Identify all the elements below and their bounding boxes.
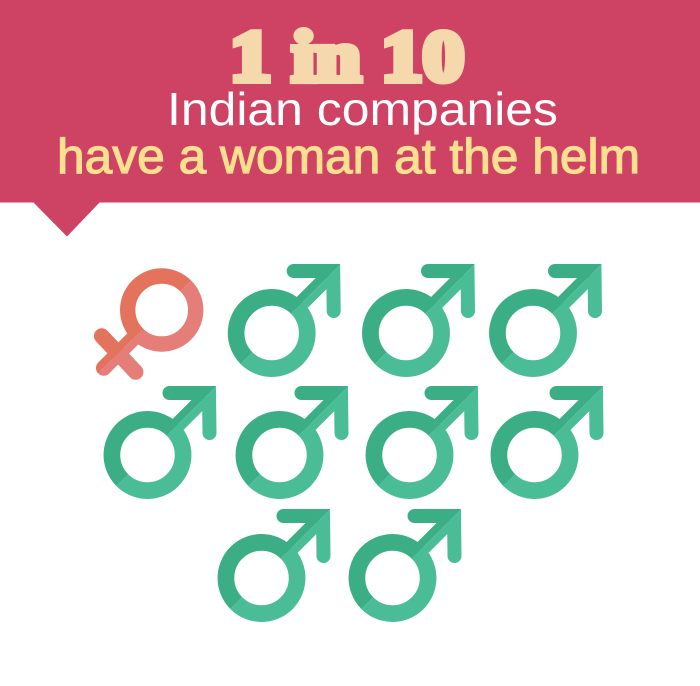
icon: male symbol row 2 no. 3 xyxy=(374,393,472,491)
icon: male symbol row 2 no. 2 xyxy=(244,393,342,491)
subtitle: Indian companies: Indian companies xyxy=(167,83,558,135)
icon: male symbol row 1 no. 3 xyxy=(497,271,595,369)
icon: female symbol xyxy=(102,276,196,372)
subtitle: have a woman at the helm: have a woman at the helm xyxy=(57,129,640,184)
icon: male symbol row 3 no. 1 xyxy=(226,516,324,614)
icon: male symbol row 1 no. 2 xyxy=(370,271,468,369)
icon: male symbol row 2 no. 1 xyxy=(112,393,210,491)
header banner xyxy=(0,0,700,236)
icon: male symbol row 3 no. 2 xyxy=(357,516,454,614)
icon: male symbol row 2 no. 4 xyxy=(499,393,596,491)
icon: male symbol row 1 no. 1 xyxy=(236,271,334,369)
title: 1 in 10: 1 in 10 xyxy=(230,16,464,96)
